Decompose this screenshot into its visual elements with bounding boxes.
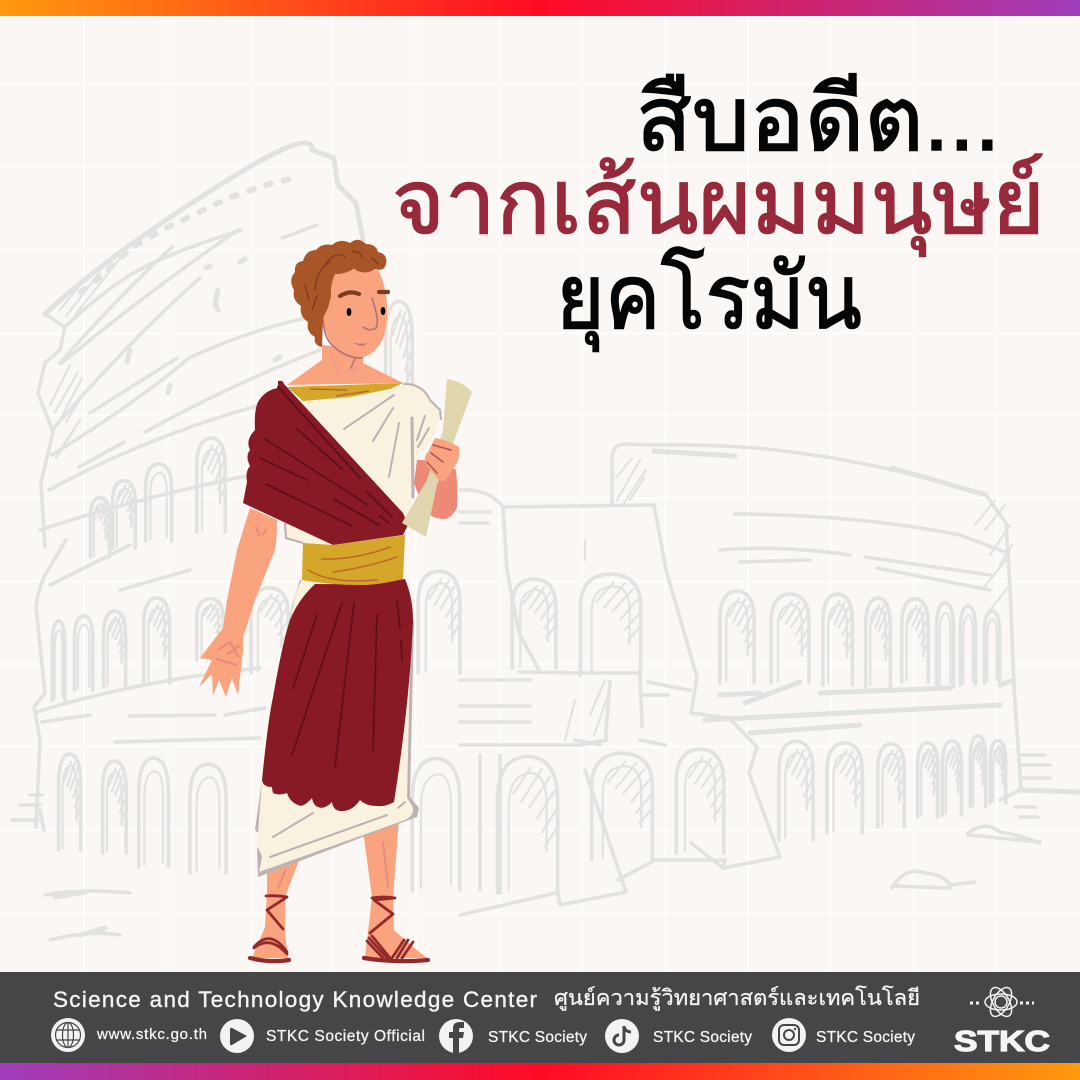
scroll (402, 379, 472, 537)
tunic upper (270, 384, 441, 550)
icon: play (220, 1019, 254, 1053)
youtube name: STKC Society Official (266, 1028, 425, 1045)
icon: tiktok (605, 1019, 639, 1053)
tiktok name: STKC Society (653, 1029, 752, 1046)
gold sash (302, 535, 405, 585)
title line 3: ยุคโรมัน (556, 247, 862, 352)
colosseum sketch: right section (412, 444, 1079, 915)
website: www.stkc.go.th (96, 1026, 207, 1043)
neck and face (287, 269, 403, 385)
footer heading English: Science and Technology Knowledge Center (53, 987, 538, 1012)
top gradient bar (0, 0, 1080, 16)
title (392, 70, 1045, 352)
gold collar (287, 383, 403, 401)
hand holding scroll (425, 438, 459, 481)
icon: globe (51, 1018, 85, 1052)
maroon shawl (243, 381, 408, 545)
tunic lower and shadow (255, 580, 419, 877)
icon: facebook (439, 1019, 473, 1053)
title line 1: สืบอดีต... (636, 70, 1000, 170)
instagram name: STKC Society (816, 1029, 915, 1046)
legs and sandals (250, 818, 428, 961)
curly hair (291, 240, 386, 347)
bottom gradient bar (0, 1063, 1080, 1080)
arm holding scroll (414, 460, 457, 519)
maroon skirt (262, 579, 413, 857)
footer band (0, 972, 1080, 1063)
STKC logo (954, 984, 1050, 1058)
logo wordmark: STKC (954, 1026, 1050, 1058)
facebook name: STKC Society (488, 1029, 587, 1046)
footer heading Thai: ศูนย์ความรู้วิทยาศาสตร์และเทคโนโลยี (554, 985, 920, 1011)
title line 2: จากเส้นผมมนุษย์ (392, 153, 1045, 257)
colosseum sketch: left curved section (12, 143, 412, 940)
left arm and hand (199, 508, 277, 697)
icon: instagram (772, 1018, 806, 1052)
illustration: Roman man in toga (199, 240, 472, 961)
logo emblem (970, 984, 1034, 1020)
